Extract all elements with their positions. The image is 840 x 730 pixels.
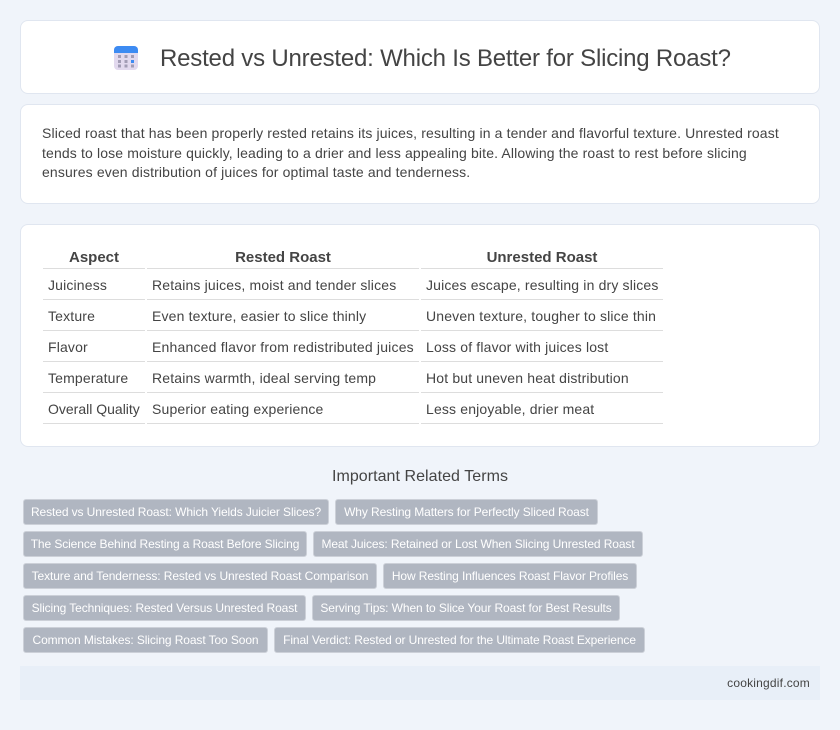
row: temperature (43, 361, 663, 386)
table header: Rested Roast (235, 249, 331, 266)
related terms tags: Serving Tips: When to Slice Your Roast for Best Results (320, 601, 612, 615)
footer source: cookingdif.com (727, 676, 810, 690)
comparison table panel (20, 224, 820, 447)
related terms tags (23, 499, 645, 653)
intro text (42, 125, 779, 180)
table header: Unrested Roast (487, 249, 597, 266)
related terms tags: The Science Behind Resting a Roast Before Slicing (31, 537, 299, 551)
row: flavor: Loss of flavor with juices lost (426, 339, 608, 355)
icon: calendar (114, 46, 138, 70)
row: juiciness: Retains juices, moist and tender slices (152, 277, 396, 293)
row: juiciness (43, 268, 663, 293)
related terms tags: How Resting Influences Roast Flavor Profiles (392, 569, 628, 583)
related terms tags: Meat Juices: Retained or Lost When Slicing Unrested Roast (321, 537, 635, 551)
related terms tags: Slicing Techniques: Rested Versus Unrested Roast (32, 601, 297, 615)
row: texture: Even texture, easier to slice thinly (152, 308, 366, 324)
table header (69, 249, 598, 266)
row: overall quality: Overall Quality (48, 401, 140, 417)
title: Rested vs Unrested: Which Is Better for Slicing Roast? (160, 45, 731, 72)
row: texture: Texture (48, 308, 95, 324)
intro text: tends to lose moisture quickly, leading to a drier and less appealing bite. Allowing the roast to rest before slicing (42, 145, 747, 161)
row: temperature: Temperature (48, 370, 128, 386)
row: juiciness: Juiciness (48, 277, 107, 293)
row: temperature: Hot but uneven heat distribution (426, 370, 629, 386)
intro panel (20, 104, 820, 204)
table header: Aspect (69, 249, 119, 266)
footer bar (20, 666, 820, 700)
row: juiciness: Juices escape, resulting in dry slices (426, 277, 659, 293)
row: texture (43, 299, 663, 324)
row: flavor: Enhanced flavor from redistributed juices (152, 339, 414, 355)
row: overall quality: Superior eating experience (152, 401, 324, 417)
intro text: Sliced roast that has been properly rested retains its juices, resulting in a tender and flavorful texture. Unrested roast (42, 125, 779, 141)
row: texture: Uneven texture, tougher to slice thin (426, 308, 656, 324)
related terms tags: Texture and Tenderness: Rested vs Unrested Roast Comparison (32, 569, 368, 583)
related terms tags: Why Resting Matters for Perfectly Sliced Roast (344, 505, 589, 519)
row: overall quality: Less enjoyable, drier meat (426, 401, 594, 417)
related terms heading: Important Related Terms (332, 468, 508, 485)
related terms tags: Common Mistakes: Slicing Roast Too Soon (32, 633, 258, 647)
related terms tags: Rested vs Unrested Roast: Which Yields Juicier Slices? (31, 505, 321, 519)
row: temperature: Retains warmth, ideal serving temp (152, 370, 376, 386)
row: overall quality (43, 392, 663, 424)
row: flavor: Flavor (48, 339, 88, 355)
row: flavor (43, 330, 663, 355)
header panel (20, 20, 820, 94)
intro text: ensures even distribution of juices for optimal taste and tenderness. (42, 164, 470, 180)
related terms tags: Final Verdict: Rested or Unrested for the Ultimate Roast Experience (283, 633, 636, 647)
